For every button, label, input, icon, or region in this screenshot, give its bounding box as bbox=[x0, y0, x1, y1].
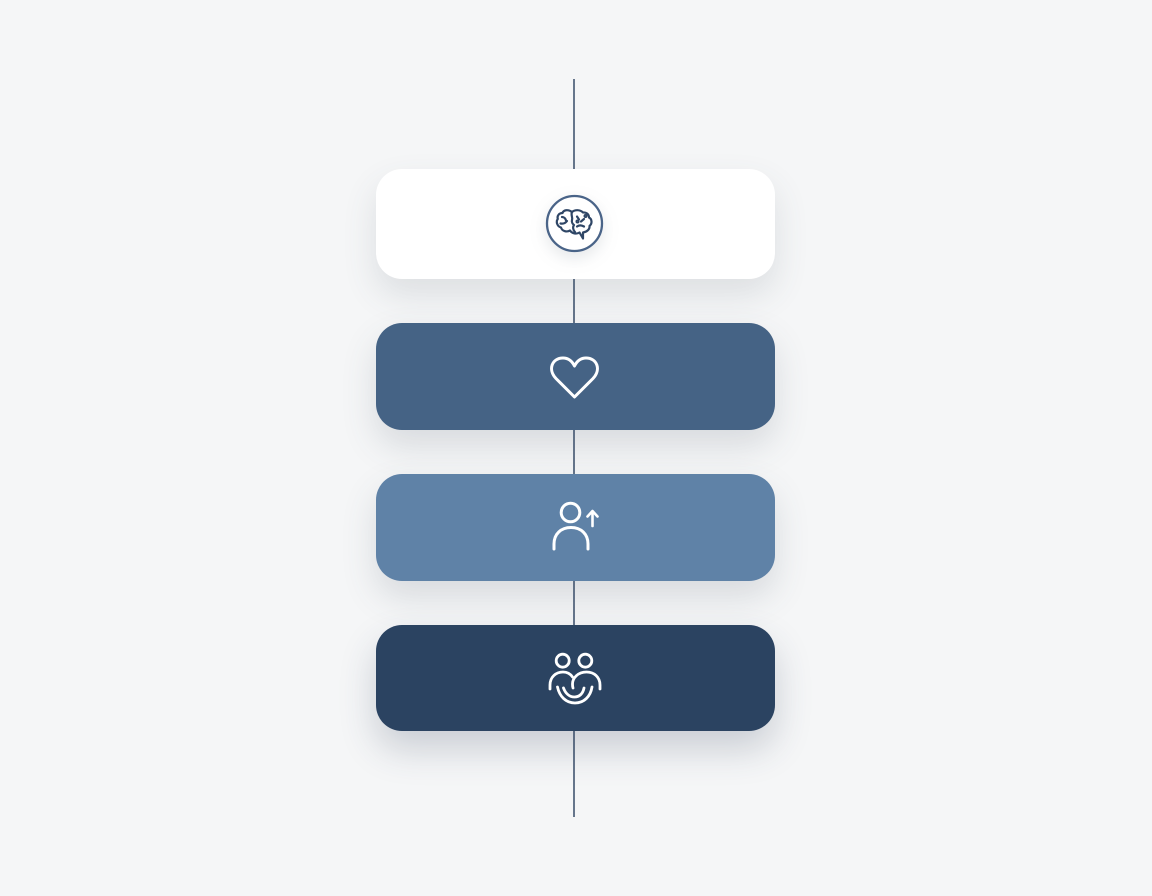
panel: person growth card bbox=[376, 474, 775, 581]
icon: brain in circle bbox=[543, 194, 606, 261]
timeline axis bbox=[573, 79, 575, 817]
icon: two people with smile bbox=[548, 652, 602, 704]
icon: person with up arrow bbox=[552, 502, 599, 550]
panel: people smile card bbox=[376, 625, 775, 731]
panel: white brain card bbox=[376, 169, 775, 279]
panel: heart card bbox=[376, 323, 775, 430]
icon: heart bbox=[550, 356, 599, 399]
